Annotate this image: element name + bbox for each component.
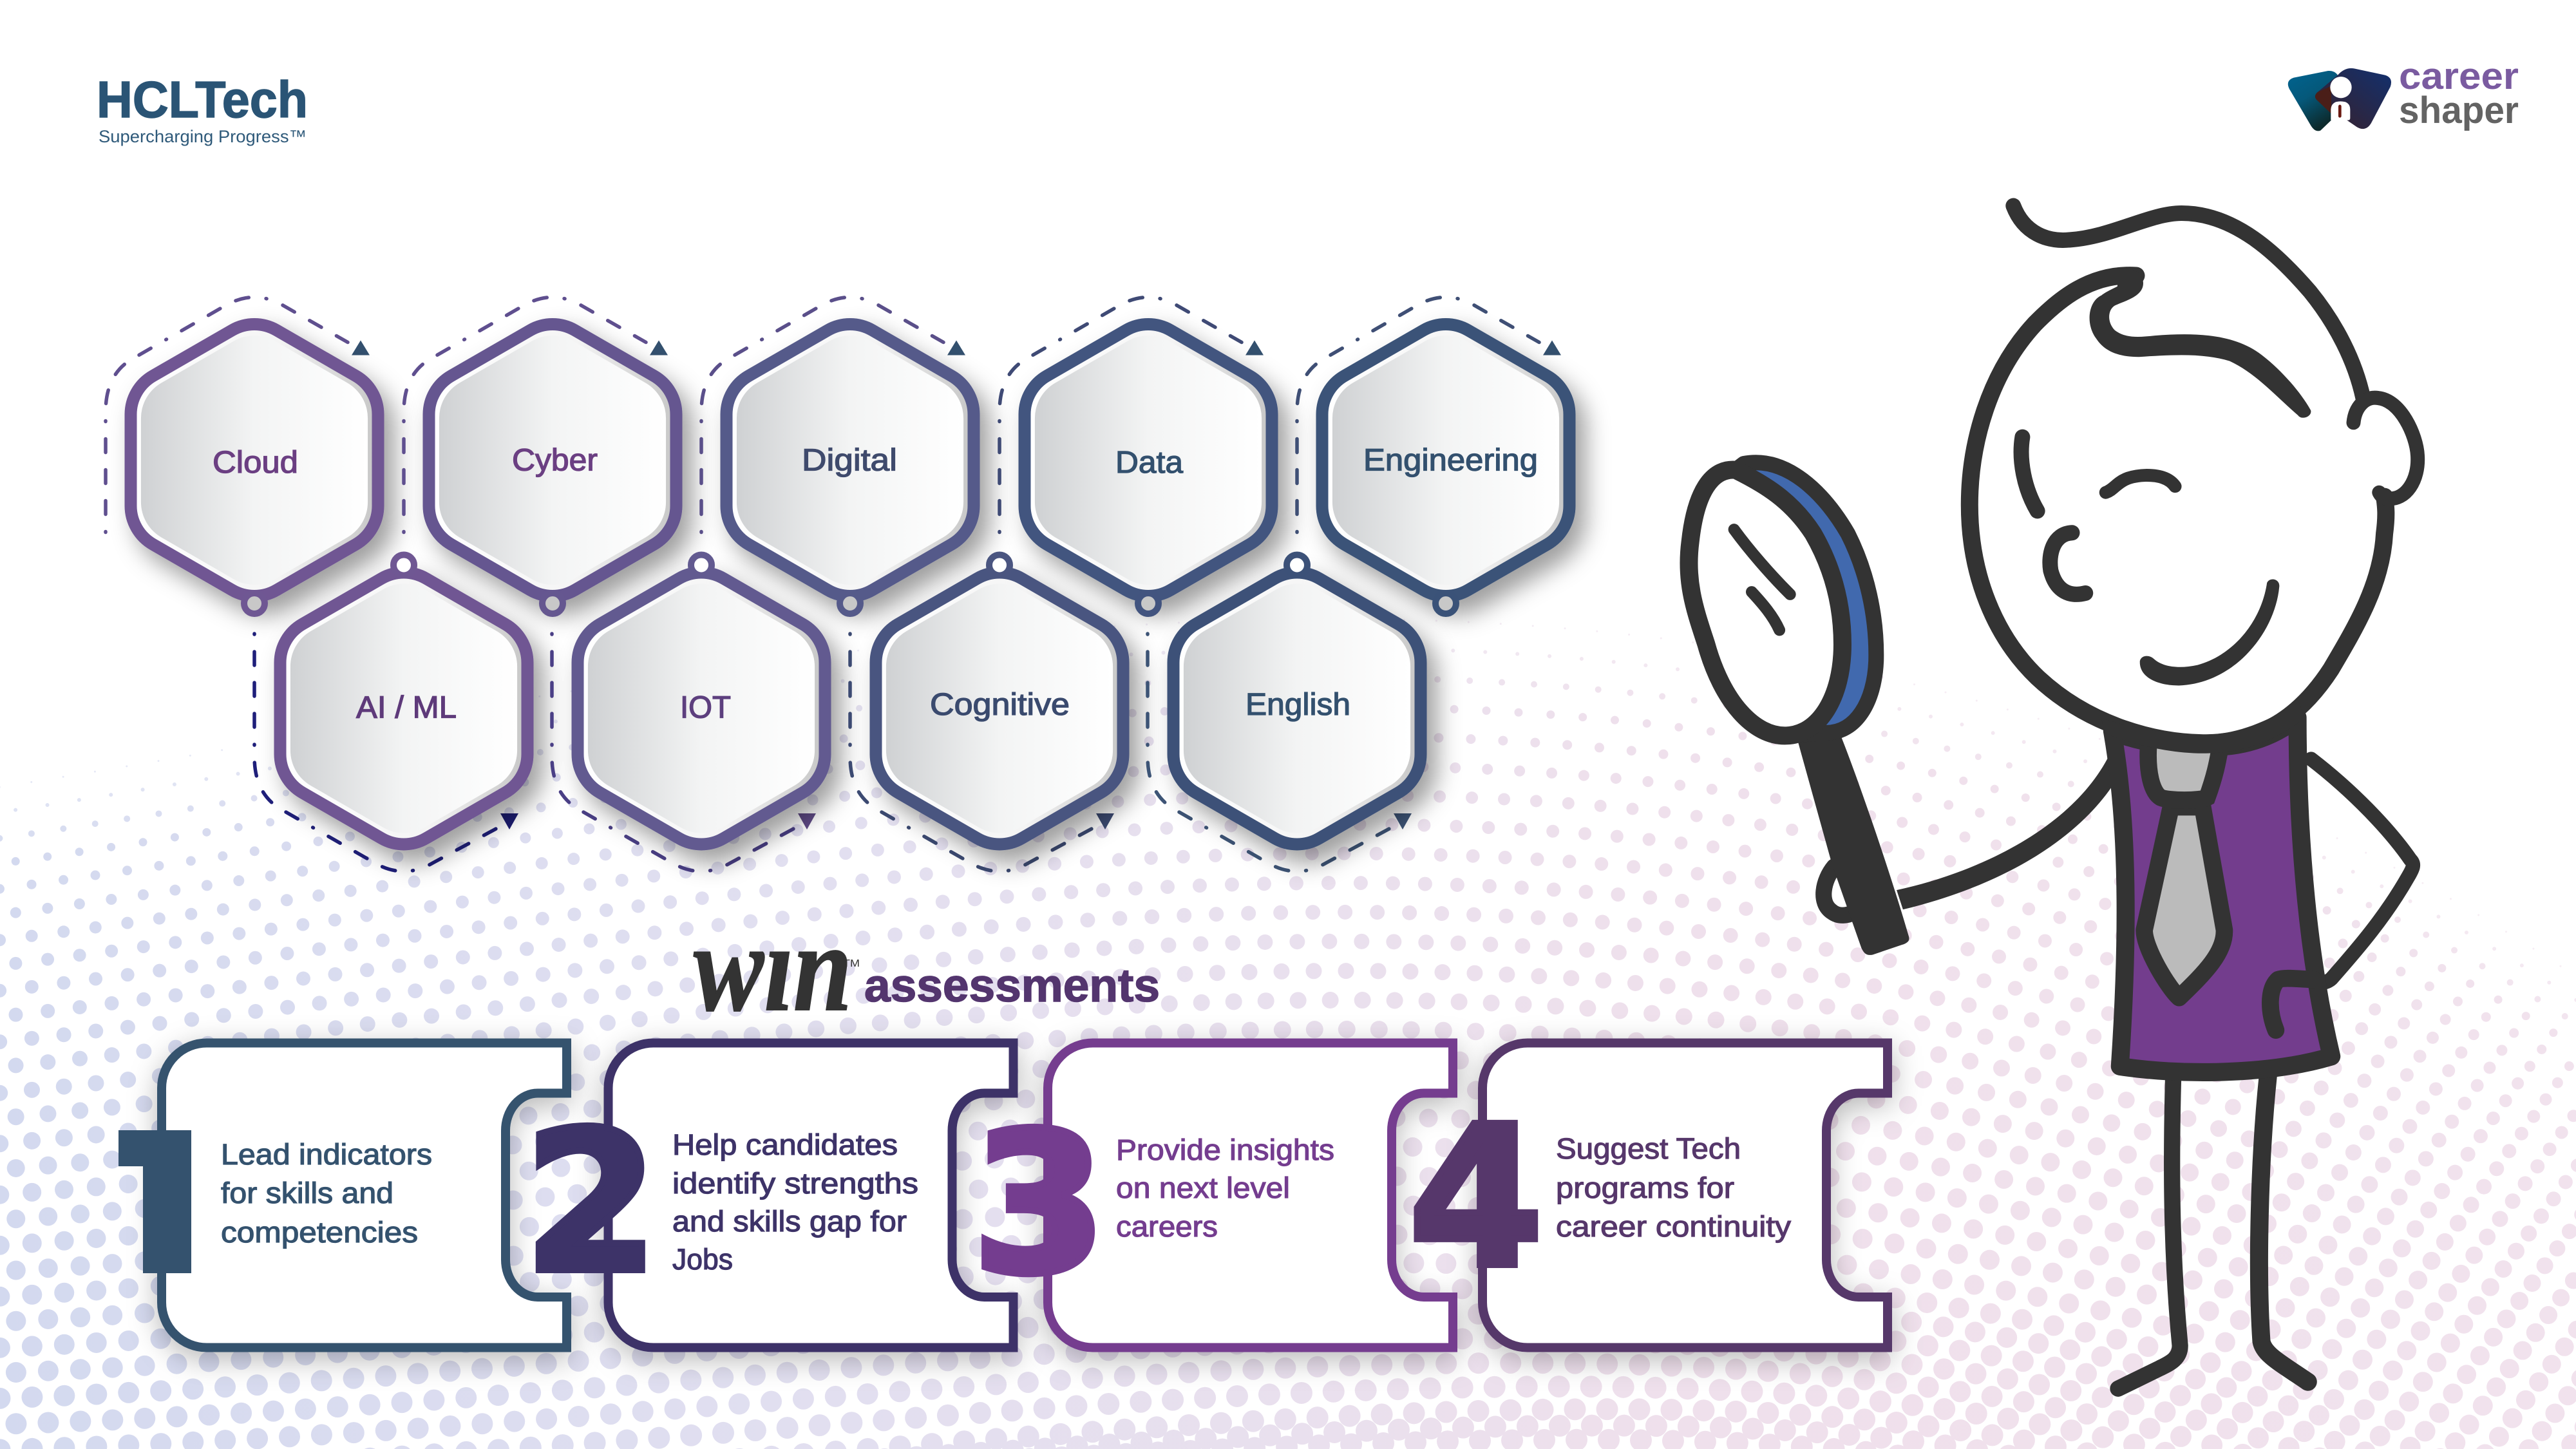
number 2: 2: [524, 1090, 659, 1316]
hexagon: IOT: [552, 555, 825, 871]
heading: WIN assessments: assessments: [864, 960, 1160, 1012]
text: card 1: competencies: [221, 1216, 418, 1249]
text: card 1: [221, 1138, 432, 1249]
number 4: 4: [1408, 1085, 1544, 1311]
text: card 2: Help candidates: [672, 1128, 898, 1161]
hexagon: English: English: [1245, 688, 1350, 722]
heading: WIN assessments: TM: [843, 958, 860, 969]
hexagon: Cyber: [404, 298, 676, 614]
hexagon: Digital: [701, 298, 974, 614]
card 2: [608, 1043, 1014, 1347]
logo: HCLTech: HCLTech: [97, 71, 308, 128]
hexagon: Engineering: Engineering: [1363, 443, 1538, 478]
number 1: 1: [93, 1092, 229, 1318]
number 3: 3: [972, 1092, 1107, 1318]
hexagon: Cyber: Cyber: [512, 443, 598, 478]
icon: magnifying glass lens: [1689, 462, 1876, 735]
logo: HCLTech: Supercharging Progress™: [99, 127, 307, 146]
hexagon: Cloud: [106, 298, 378, 614]
text: card 3: careers: [1116, 1210, 1218, 1243]
figure: body, arms, legs and tie: [1798, 717, 2413, 1388]
text: card 3: [1116, 1133, 1334, 1243]
text: card 4: [1556, 1132, 1792, 1243]
logo: career shaper: shaper: [2399, 90, 2519, 131]
logo: career shaper: career: [2399, 55, 2519, 97]
heading: WIN assessments: [694, 898, 1160, 1037]
text: card 2: Jobs: [672, 1243, 733, 1276]
text: card 2: [672, 1128, 918, 1276]
hexagon: Cognitive: [850, 555, 1123, 871]
text: card 4: career continuity: [1556, 1210, 1792, 1243]
text: card 2: and skills gap for: [672, 1205, 907, 1238]
hexagon: English: [1148, 555, 1421, 871]
hexagon: Cloud: Cloud: [213, 446, 298, 480]
hexagon: Data: [999, 298, 1272, 614]
text: card 2: identify strengths: [672, 1167, 918, 1200]
hexagon: Cognitive: Cognitive: [930, 688, 1070, 722]
logo: career shaper: [2288, 55, 2519, 131]
card 3: [1048, 1043, 1453, 1347]
text: card 3: Provide insights: [1116, 1133, 1334, 1166]
hexagon: AI / ML: [254, 555, 527, 871]
text: card 1: Lead indicators: [221, 1138, 432, 1171]
halftone dot background: [0, 619, 2576, 1449]
card 1: [162, 1043, 567, 1347]
card 4: [1482, 1043, 1888, 1347]
text: card 4: programs for: [1556, 1171, 1734, 1204]
heading: WIN assessments: win: [694, 898, 852, 1037]
hexagon: AI / ML: AI / ML: [356, 690, 457, 725]
text: card 3: on next level: [1116, 1171, 1290, 1204]
text: card 4: Suggest Tech: [1556, 1132, 1741, 1165]
hexagon: Engineering: [1297, 298, 1569, 614]
hexagon: Data: Data: [1115, 446, 1183, 480]
text: card 1: for skills and: [221, 1177, 393, 1209]
character: stick figure with magnifying glass: [1689, 206, 2418, 1388]
hexagon: Digital: Digital: [802, 443, 897, 478]
figure: head, hair and face: [1969, 206, 2418, 753]
hexagon: IOT: IOT: [680, 690, 731, 725]
